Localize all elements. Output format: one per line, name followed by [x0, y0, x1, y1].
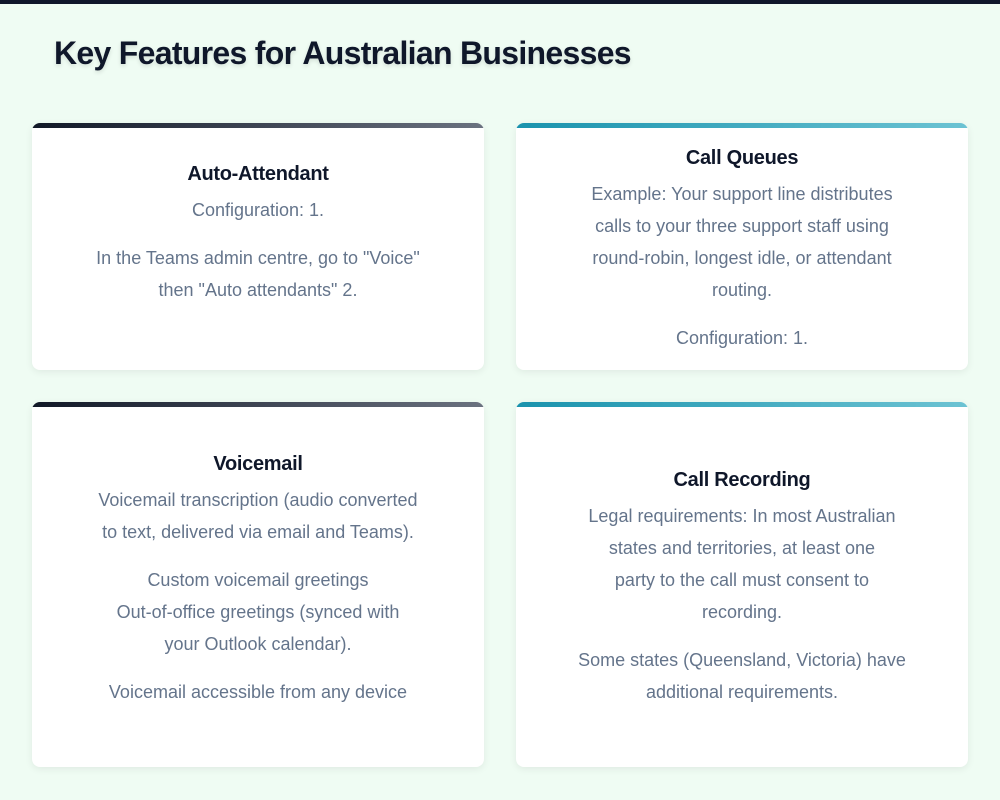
text: call queues example: calls to your three support staff using [595, 216, 889, 236]
text: greetings: Out-of-office greetings (synced with [117, 602, 399, 622]
text: transcription: to text, delivered via email and Teams). [102, 522, 414, 542]
text: call queues example: round-robin, longest idle, or attendant [592, 248, 892, 268]
text: auto-attendant config: Configuration: 1. [192, 200, 324, 220]
heading: auto-attendant: Auto-Attendant [187, 162, 329, 184]
title: Key Features for Australian Businesses [54, 35, 631, 71]
text: legal requirements: recording. [702, 602, 782, 622]
panel: call queues [516, 123, 968, 370]
heading: voicemail: Voicemail [213, 452, 303, 474]
text: legal requirements: party to the call must consent to [615, 570, 869, 590]
text: auto-attendant steps: then "Auto attendants" 2. [159, 280, 357, 300]
text: auto-attendant steps [96, 248, 420, 300]
text: call queues example: routing. [712, 280, 772, 300]
panel: auto-attendant [32, 123, 484, 370]
text: call queues example: Example: Your support line distributes [591, 184, 893, 204]
panel: voicemail [32, 402, 484, 767]
panel: call recording [516, 402, 968, 767]
text: legal requirements: Legal requirements: In most Australian [588, 506, 896, 526]
text: transcription [98, 490, 418, 542]
text: auto-attendant steps: In the Teams admin centre, go to "Voice" [96, 248, 420, 268]
text: legal requirements: states and territories, at least one [609, 538, 875, 558]
text: greetings: Custom voicemail greetings [147, 570, 369, 590]
text: greetings: your Outlook calendar). [164, 634, 352, 654]
heading: call queues: Call Queues [686, 146, 798, 168]
text: call queues config: Configuration: 1. [676, 328, 808, 348]
text: additional requirements: additional requirements. [646, 682, 838, 702]
text: access: Voicemail accessible from any device [109, 682, 407, 702]
heading: call recording: Call Recording [674, 468, 810, 490]
text: greetings [117, 570, 399, 654]
text: legal requirements [588, 506, 896, 622]
text: additional requirements: Some states (Queensland, Victoria) have [578, 650, 906, 670]
text: call queues example [591, 184, 893, 300]
text: transcription: Voicemail transcription (audio converted [98, 490, 418, 510]
text: additional requirements [578, 650, 906, 702]
